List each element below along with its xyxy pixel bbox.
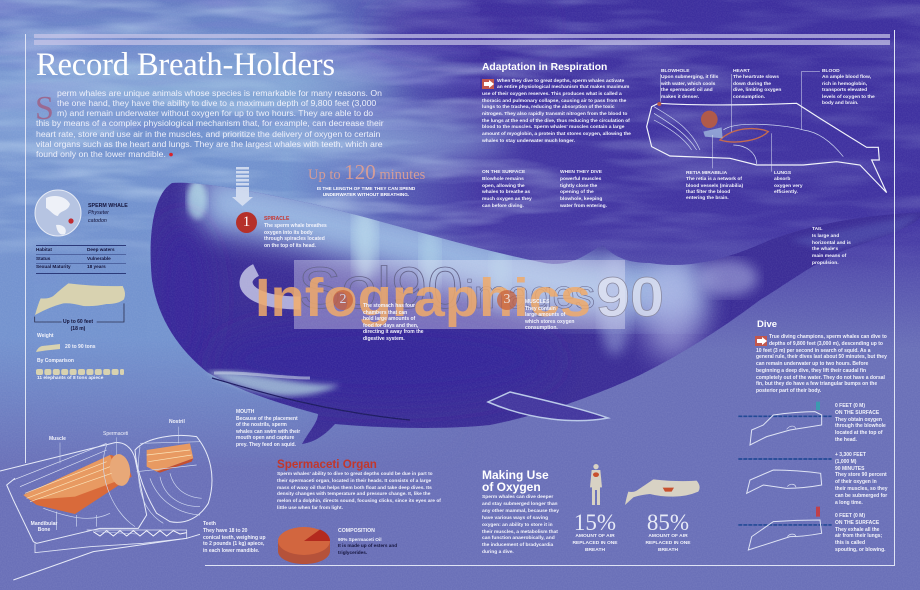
dive step 2: + 3,300 FEET	[835, 452, 866, 458]
number 1 badge	[236, 212, 257, 233]
mouth label: of the nostrils, sperm	[236, 422, 287, 428]
intro text: heart rate, store and use air in the muscles, and prioritize the delivery of oxygen to certain	[36, 129, 380, 139]
data table	[36, 245, 126, 274]
retia mirabilia label: blood vessels (mirabilia)	[686, 184, 743, 189]
tail label: propulsion.	[812, 261, 839, 266]
retia mirabilia label: entering the brain.	[686, 196, 729, 201]
size label: (18 m)	[71, 326, 85, 332]
spiracle label: on the top of its head.	[264, 243, 316, 249]
on the surface text: open, allowing the	[482, 184, 525, 189]
dive text	[756, 334, 887, 394]
data table: Sexual Maturity	[36, 264, 71, 269]
dive step 3: spouting, or blowing.	[835, 547, 886, 553]
mouth label: mouth open and capture	[236, 435, 294, 441]
spiracle label: The sperm whale breathes	[264, 223, 327, 229]
heading: spermaceti organ: Spermaceti Organ	[277, 458, 377, 471]
label: nostril: Nostril	[169, 419, 185, 425]
dive text: depths of 9,800 feet (3,000 m), descending up to	[769, 341, 883, 347]
mouth label	[236, 409, 300, 448]
mouth label: prey. They feed on squid.	[236, 442, 296, 448]
stomach label	[363, 303, 424, 342]
teeth label: They have 18 to 20	[203, 528, 247, 534]
on the surface text: can before diving.	[482, 204, 524, 209]
number 3 badge: 3	[504, 292, 510, 307]
teeth label: conical teeth, weighing up	[203, 535, 266, 541]
oxygen text: during a dive.	[482, 550, 514, 555]
when they dive text	[560, 170, 607, 209]
adaptation text: thoracic and pulmonary collapse, causing air to pass from the	[482, 99, 626, 104]
spermaceti text: Sperm whales' ability to dive to great depths could be due in part to	[277, 472, 433, 477]
intro text: found only on the lower mandible. ●	[36, 149, 174, 159]
retia mirabilia label	[686, 171, 743, 201]
label: spermaceti: Spermaceti	[103, 431, 128, 437]
muscle label: They contain	[525, 306, 556, 312]
heart label: down during the	[733, 82, 771, 87]
number 2 badge	[333, 290, 353, 310]
mouth label: Because of the placement	[236, 416, 298, 422]
dive text: beginning a deep dive, they lift their caudal fin	[756, 368, 866, 374]
callout caption: IS THE LENGTH OF TIME THEY CAN SPEND	[317, 186, 415, 191]
dive step 2: 90 MINUTES	[835, 466, 864, 472]
blood label: levels of oxygen to the	[822, 95, 875, 100]
dive text: posterior part of their body.	[756, 388, 821, 394]
dive text: True diving champions, sperm whales can dive to	[769, 334, 887, 340]
dive text: general rule, their dives last about 50 minutes, but they	[756, 354, 887, 360]
oxygen text: can function anaerobically, and	[482, 536, 555, 541]
callout caption	[317, 186, 416, 197]
dive step 1: located at the top of	[835, 430, 882, 436]
stat caption: whale	[645, 534, 691, 553]
composition text	[338, 537, 397, 555]
stat caption: human: REPLACED IN ONE	[572, 541, 618, 546]
data table: Habitat	[36, 247, 52, 252]
tail label	[812, 227, 851, 266]
species name	[88, 203, 128, 224]
blowhole label	[661, 69, 718, 100]
lungs label: oxygen very	[774, 184, 803, 189]
mouth label: whales can swim with their	[236, 429, 300, 435]
adaptation text: lungs to the trachea, reducing the absorption of the toxic	[482, 105, 615, 110]
spiracle label: oxygen into its body	[264, 230, 313, 236]
comparison value: 11 elephants of 8 tons apiece	[37, 376, 103, 381]
callout caption: UNDERWATER WITHOUT BREATHING.	[323, 192, 409, 197]
retia mirabilia label: that filter the blood	[686, 190, 730, 195]
teeth label: in each lower mandible.	[203, 548, 259, 554]
watermark: images	[465, 273, 595, 317]
adaptation text: whales to stay underwater much longer.	[482, 139, 575, 144]
adaptation text: amount of myoglobin, a protein that stores oxygen, allowing the	[482, 132, 631, 137]
stat caption: whale: AMOUNT OF AIR	[648, 534, 688, 539]
oxygen text: Sperm whales can dive deeper	[482, 495, 553, 500]
comparison label: By Comparison	[37, 358, 74, 364]
blood label: An ample blood flow,	[822, 75, 871, 80]
label: mandibular bone: Bone	[38, 527, 50, 533]
watermark: 90	[596, 265, 664, 328]
blowhole label: BLOWHOLE	[661, 69, 690, 74]
oxygen text: have various ways of saving	[482, 516, 548, 521]
blowhole label: Upon submerging, it fills	[661, 75, 718, 80]
stat caption: human: AMOUNT OF AIR	[575, 534, 615, 539]
dive step 1: 0 FEET (0 M)	[835, 403, 865, 409]
dive step 1: through the blowhole	[835, 423, 886, 429]
on the surface text	[482, 170, 532, 209]
stomach label: hold large amounts of	[363, 316, 415, 322]
when they dive text: WHEN THEY DIVE	[560, 170, 602, 175]
oxygen text: any other mammal, because they	[482, 509, 559, 514]
dive step 2: their muscles, so they	[835, 486, 888, 492]
retia mirabilia label: The retia is a network of	[686, 177, 742, 182]
intro text: the one hand, they have the ability to dive to a maximum depth of 9,800 feet (3,000	[57, 98, 376, 108]
spiracle label: SPIRACLE	[264, 216, 289, 222]
stomach label: digestive system.	[363, 336, 405, 342]
when they dive text: tightly close the	[560, 184, 597, 189]
intro text: perm whales are unique animals whose species is remarkable for many reasons. On	[57, 88, 382, 98]
data table: Vulnerable	[87, 256, 111, 261]
stat: 15 percent: 15%	[574, 510, 616, 535]
heart label: dive, limiting oxygen	[733, 88, 781, 93]
spiracle label	[264, 216, 327, 249]
tail label: TAIL	[812, 227, 823, 232]
composition text: It is made up of esters and	[338, 543, 397, 548]
oxygen text: oxygen: an ability to store it in	[482, 523, 553, 528]
heart label: HEART	[733, 69, 750, 74]
title: Record Breath-Holders	[36, 47, 335, 83]
heading: making use of oxygen	[482, 468, 549, 494]
muscle label: consumption.	[525, 325, 558, 331]
muscle label	[525, 299, 574, 331]
callout: up to 120 minutes: Up to 120 minutes	[308, 160, 425, 184]
retia mirabilia label: RETIA MIRABILIA	[686, 171, 727, 176]
label: mandibular bone: Mandibular	[31, 521, 57, 527]
tail label: main means of	[812, 254, 846, 259]
species name: Physeter	[88, 210, 109, 216]
spermaceti text: melon of a dolphin, directs sound, focusing clicks, since its eyes are of	[277, 499, 441, 504]
when they dive text: powerful muscles	[560, 177, 601, 182]
size label: Up to 60 feet	[63, 319, 93, 325]
adaptation text: blood to the muscles. Sperm whales' muscles contain a large	[482, 125, 624, 130]
teeth label	[203, 521, 266, 554]
dive text: can remain underwater up to two hours. Before	[756, 361, 868, 367]
muscle label: large amounts of	[525, 312, 565, 318]
composition heading: COMPOSITION	[338, 528, 375, 534]
dive step 2: (1,000 M)	[835, 459, 856, 465]
intro text: this by means of a complex physiological mechanism that, for example, can decrease their	[36, 118, 384, 128]
heading: making use of oxygen: of Oxygen	[482, 480, 541, 494]
blowhole label: makes it denser.	[661, 95, 699, 100]
dive step 3: air from their lungs;	[835, 533, 882, 539]
heading: dive: Dive	[757, 319, 777, 330]
stat caption: human: BREATH	[585, 548, 605, 553]
watermark: Sol90	[298, 256, 463, 321]
oxygen text: and stay submerged longer than	[482, 502, 558, 507]
on the surface text: much oxygen as they	[482, 197, 532, 202]
label: muscle: Muscle	[49, 436, 66, 442]
adaptation text	[482, 78, 631, 144]
number 2 badge: 2	[340, 292, 346, 307]
spermaceti text: density changes with temperature and pressure change. It, like the	[277, 492, 430, 497]
dive step 3: ON THE SURFACE	[835, 520, 879, 526]
muscle label: which stores oxygen	[525, 319, 574, 325]
blowhole label: the spermaceti oil and	[661, 88, 713, 93]
adaptation text: an entire physiological mechanism that makes maximum	[497, 85, 629, 90]
watermark: Infographics	[255, 268, 591, 328]
dive step 3: They exhale all the	[835, 527, 879, 533]
species name: catodon	[88, 218, 107, 224]
blood label: transports elevated	[822, 88, 867, 93]
blood label: rich in hemoglobin,	[822, 82, 867, 87]
data table: Deep waters	[87, 247, 115, 252]
heading: making use of oxygen: Making Use	[482, 468, 549, 482]
weight label: Weight	[37, 333, 54, 339]
data table: 18 years	[87, 264, 106, 269]
dive step 1: the head.	[835, 437, 857, 443]
drop cap: S	[35, 90, 54, 127]
dive step 2: can be submerged for	[835, 493, 887, 499]
adaptation text: nitrogen. They also rapidly transmit nitrogen from the blood to	[482, 112, 627, 117]
spermaceti text: little use when far from light.	[277, 506, 343, 511]
lungs label	[774, 171, 803, 195]
number 1 badge: 1	[243, 214, 250, 230]
label: mandibular bone	[30, 521, 58, 533]
sperm whale	[151, 180, 920, 444]
dive step 3: this is called	[835, 540, 865, 546]
when they dive text: blowhole, keeping	[560, 197, 602, 202]
teeth label: Teeth	[203, 521, 216, 527]
dive text: fin, but they do have a few triangular bumps on the	[756, 381, 877, 387]
dive step 2: They store 90 percent	[835, 472, 887, 478]
mouth label: MOUTH	[236, 409, 254, 415]
size label	[63, 319, 93, 332]
stat caption: human	[572, 534, 618, 553]
number 3 badge	[497, 290, 517, 310]
data table: Status	[36, 256, 50, 261]
stat: 85 percent: 85%	[647, 510, 689, 535]
blood label: body and brain.	[822, 101, 858, 106]
dive step 2: of their oxygen in	[835, 479, 877, 485]
tail label: the whale's	[812, 247, 838, 252]
weight value: 20 to 90 tons	[65, 344, 96, 350]
blowhole label: with water, which cools	[661, 82, 715, 87]
tail label: Is large and	[812, 234, 839, 239]
heart label	[733, 69, 782, 100]
dive text: 10 feet (3 m) per second in search of squid. As a	[756, 348, 871, 354]
when they dive text: opening of the	[560, 190, 594, 195]
dive step 3: 0 FEET (0 M)	[835, 513, 865, 519]
lungs label: absorb	[774, 177, 790, 182]
composition text: 90% Spermaceti Oil	[338, 537, 382, 542]
on the surface text: whales to breathe as	[482, 190, 530, 195]
dive step 1: They obtain oxygen	[835, 417, 882, 423]
dive step 2	[835, 452, 888, 506]
teeth label: to 2 pounds (1 kg) apiece,	[203, 541, 264, 547]
spermaceti text: mass of waxy oil that helps them both float and take deep dives. Its	[277, 486, 432, 490]
heading: adaptation in respiration: Adaptation in Respiration	[482, 62, 607, 73]
on the surface text: Blowhole remains	[482, 177, 524, 182]
stomach label: directing it away from the	[363, 329, 424, 335]
blood label	[822, 69, 875, 106]
intro text	[36, 88, 384, 159]
adaptation text: the lungs at the end of the dive, thus reducing the circulation of	[482, 119, 630, 124]
oxygen text	[482, 494, 559, 555]
intro text: vital organs such as the heart and lungs. They are the largest whales with teeth, which are	[36, 139, 383, 149]
stat caption: whale: BREATH	[658, 548, 678, 553]
composition text: triglycerides.	[338, 550, 367, 555]
dive step 2: a long time.	[835, 500, 863, 506]
species name: SPERM WHALE	[88, 203, 128, 209]
muscle label: MUSCLES	[525, 299, 549, 305]
adaptation text: use of their oxygen reserves. This produces what is called a	[482, 92, 622, 97]
stat caption: whale: REPLACED IN ONE	[645, 541, 691, 546]
dive text: completely out of the water. They do not have a dorsal	[756, 374, 885, 380]
stomach label: The stomach has four	[363, 303, 415, 309]
dive step 1	[835, 403, 886, 443]
intro text: m) and remain underwater without oxygen for up to two hours. They are able to do	[57, 108, 373, 118]
spiracle label: through spiracles located	[264, 236, 325, 242]
oxygen text: their muscles, a metabolism that	[482, 530, 558, 535]
heart label: The heartrate slows	[733, 75, 779, 80]
dive step 1: ON THE SURFACE	[835, 410, 879, 416]
spermaceti text	[277, 472, 441, 511]
tail label: horizontal and is	[812, 241, 851, 246]
stomach label: chambers that can	[363, 310, 407, 316]
dive step 3	[835, 513, 886, 553]
stomach label: food for days and then,	[363, 323, 418, 329]
adaptation text: When they dive to great depths, sperm whales activate	[497, 78, 624, 84]
when they dive text: water from entering.	[560, 204, 607, 209]
lungs label: LUNGS	[774, 171, 791, 176]
heart label: consumption.	[733, 95, 765, 100]
oxygen text: the inducement of bradycardia	[482, 543, 553, 548]
lungs label: efficiently.	[774, 190, 798, 195]
blood label: BLOOD	[822, 69, 840, 74]
on the surface text: ON THE SURFACE	[482, 170, 525, 175]
spermaceti text: their spermaceti organ, located in their heads. It consists of a large	[277, 479, 431, 484]
